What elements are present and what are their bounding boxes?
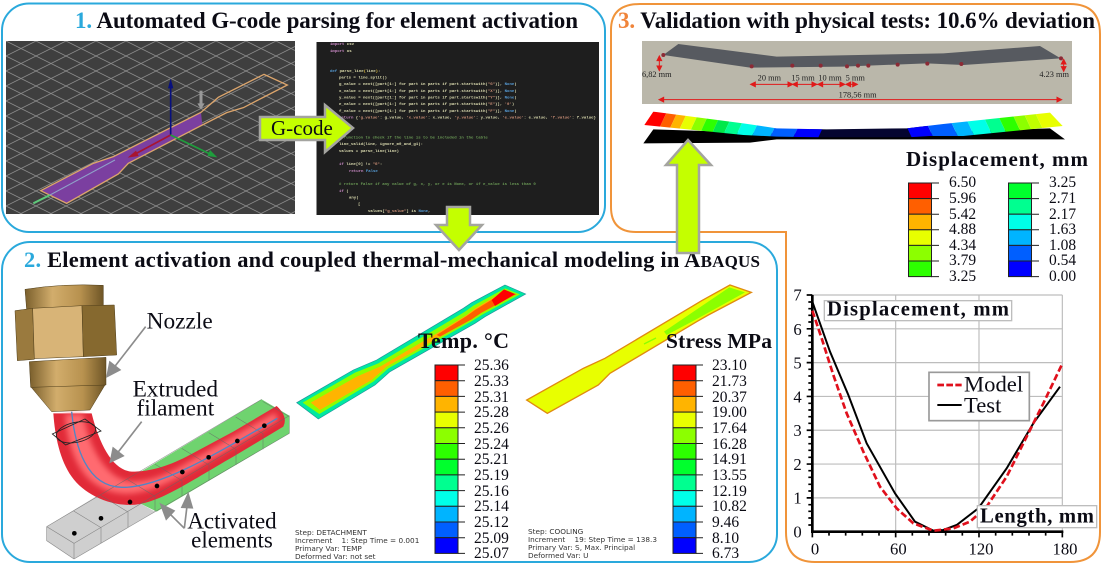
labels: lower range: 1.08 bbox=[1049, 237, 1076, 254]
labels: lower range bbox=[1049, 174, 1076, 285]
cross-section marker bbox=[52, 418, 101, 446]
labels: 12.19 bbox=[712, 483, 747, 500]
labels: upper range: 6.50 bbox=[949, 174, 976, 191]
labels: 25.24 bbox=[474, 436, 509, 453]
code editor screenshot: values = parse_line(line) bbox=[339, 149, 399, 154]
code editor screenshot: if line[0] != "G": bbox=[339, 162, 382, 167]
colour bar: lower range bbox=[1008, 183, 1039, 277]
x tick labels: 120 bbox=[969, 540, 993, 559]
illustration: nozzle and filament bbox=[15, 285, 289, 559]
code editor screenshot: any( bbox=[349, 196, 359, 200]
y tick labels: 3 bbox=[793, 421, 802, 440]
code editor screenshot: g_value = next([part[1:] for part in parts if part.startswith("G")], None) bbox=[339, 82, 517, 87]
toolpath line bbox=[33, 195, 50, 203]
label: y axis: Displacement, mm bbox=[827, 298, 1009, 320]
heading: panel 1: 1. Automated G-code parsing for element activation bbox=[75, 8, 578, 33]
labels: 6.73 bbox=[712, 545, 739, 562]
labels: 13.55 bbox=[712, 467, 747, 484]
arrow: step 2 to step 3 bbox=[666, 140, 711, 253]
labels: 25.36 bbox=[474, 357, 509, 374]
arrows: activated elements bbox=[159, 492, 193, 528]
labels: 25.28 bbox=[474, 404, 509, 421]
labels: lower range: 0.54 bbox=[1049, 252, 1076, 269]
code editor screenshot: parts = line.split() bbox=[339, 76, 387, 80]
solver info: temperature: Deformed Var: not set bbox=[295, 552, 376, 561]
element mesh bbox=[47, 399, 289, 559]
labels: 25.12 bbox=[474, 514, 509, 531]
labels: 25.14 bbox=[474, 498, 509, 515]
dimension labels: 4.23 mm bbox=[1039, 70, 1069, 79]
slicer 3D view bbox=[6, 41, 295, 214]
heading: panel 2: 2. Element activation and coupled thermal-mechanical modeling in ABAQUS bbox=[24, 247, 760, 272]
chart legend: Test bbox=[964, 393, 1002, 418]
code editor screenshot: def parse_line(line): bbox=[330, 69, 380, 74]
labels: 25.19 bbox=[474, 467, 509, 484]
labels: lower range: 1.63 bbox=[1049, 221, 1076, 238]
simulated deformed specimen bbox=[643, 112, 1065, 144]
arrow: nozzle bbox=[106, 327, 146, 378]
code editor screenshot: e_value = next([part[1:] for part in parts if part.startswith("E")], '0') bbox=[339, 102, 514, 107]
y tick labels: 0 bbox=[793, 522, 802, 541]
labels: 20.37 bbox=[712, 389, 747, 406]
code editor screenshot: f_value = next([part[1:] for part in parts if part.startswith("F")], None) bbox=[339, 109, 517, 114]
solver info: stress: Deformed Var: U bbox=[528, 551, 588, 560]
legend: stress: Stress MPa bbox=[666, 329, 772, 353]
deposition points bbox=[72, 423, 267, 536]
code editor screenshot: import os bbox=[330, 49, 352, 54]
labels bbox=[712, 357, 747, 562]
label: activated elements: Activated bbox=[187, 509, 277, 534]
labels: upper range bbox=[949, 174, 976, 285]
dimension labels: 178,56 mm bbox=[839, 91, 877, 100]
colour bar bbox=[435, 365, 465, 553]
solver info: temperature bbox=[295, 528, 419, 561]
dimension labels: 5 mm bbox=[846, 73, 865, 82]
y tick labels: 6 bbox=[793, 320, 802, 339]
contour: stress bbox=[527, 285, 751, 413]
axis: vertical bbox=[168, 85, 173, 135]
measure points bbox=[661, 53, 1063, 68]
code editor screenshot: line_valid(line, ignore_m0_and_g1): bbox=[339, 142, 423, 147]
grey inactive elements bbox=[47, 494, 155, 559]
nozzle body bbox=[15, 285, 117, 412]
label: activated elements: elements bbox=[191, 527, 273, 552]
dimension arrows bbox=[657, 56, 1066, 102]
labels: 19.00 bbox=[712, 404, 747, 421]
solver info: stress: Primary Var: S, Max. Principal bbox=[528, 543, 635, 552]
grid bbox=[812, 295, 1062, 532]
code editor screenshot: # return False if any value of g, x, y, or e is None, or if e_value is less than 0 bbox=[339, 182, 536, 187]
labels: upper range: 3.79 bbox=[949, 252, 976, 269]
labels: lower range: 2.71 bbox=[1049, 190, 1076, 207]
label: extruded filament bbox=[133, 377, 218, 422]
label: x axis: Length, mm bbox=[980, 506, 1094, 528]
axis: red bbox=[133, 135, 171, 155]
dimension labels: 20 mm bbox=[758, 73, 782, 82]
legend: displacement bbox=[906, 147, 1088, 285]
line chart: displacement vs length bbox=[793, 286, 1097, 559]
axis: green bbox=[171, 135, 210, 154]
solver info: temperature: Step: DETACHMENT bbox=[295, 528, 367, 537]
legend: temperature bbox=[418, 328, 509, 562]
heading: panel 3: 3. Validation with physical tests: 10.6% deviation bbox=[618, 8, 1095, 33]
solver info: stress: Step: COOLING bbox=[528, 527, 584, 536]
labels bbox=[474, 357, 509, 562]
code editor screenshot: import csv bbox=[330, 42, 355, 47]
dimension labels: 15 mm bbox=[791, 73, 815, 82]
x tick labels bbox=[811, 540, 1077, 559]
labels: upper range: 3.25 bbox=[949, 268, 976, 285]
series: test bbox=[812, 302, 1060, 531]
photo of printed specimen bbox=[642, 41, 1072, 104]
contour: temperature bbox=[297, 285, 526, 419]
y tick labels: 2 bbox=[793, 455, 802, 474]
labels: 9.46 bbox=[712, 514, 739, 531]
nozzle marker bbox=[196, 91, 205, 104]
legend: temperature: Temp. °C bbox=[418, 328, 509, 353]
code editor screenshot: x_value = next([part[1:] for part in parts if part.startswith("X")], None) bbox=[339, 89, 517, 94]
labels: lower range: 3.25 bbox=[1049, 174, 1076, 191]
label: activated elements bbox=[187, 509, 277, 552]
code editor screenshot: return False bbox=[349, 169, 378, 174]
specimen: printed portion bbox=[42, 112, 202, 203]
toolpath centreline bbox=[72, 412, 277, 487]
y tick labels bbox=[793, 286, 802, 541]
labels: 25.21 bbox=[474, 451, 509, 468]
labels: 23.10 bbox=[712, 357, 747, 374]
series: model bbox=[812, 311, 1062, 531]
dimension labels: 10 mm bbox=[818, 73, 842, 82]
solver info: temperature: Increment 1: Step Time = 0.001 bbox=[295, 536, 419, 545]
dimension labels bbox=[642, 70, 1069, 100]
labels: 21.73 bbox=[712, 373, 747, 390]
panel: G-code parsing outline bbox=[2, 4, 605, 232]
y tick labels: 7 bbox=[793, 286, 802, 305]
green activated elements bbox=[128, 399, 289, 512]
label: extruded filament: filament bbox=[136, 396, 215, 422]
y tick labels: 4 bbox=[793, 387, 802, 406]
labels: 25.33 bbox=[474, 373, 509, 390]
code editor screenshot: y_value = next([part[1:] for part in parts if part.startswith("Y")], None) bbox=[339, 96, 517, 100]
axes bbox=[812, 295, 1063, 532]
labels: upper range: 4.88 bbox=[949, 221, 976, 238]
panel: validation outline bbox=[611, 4, 1100, 562]
y tick labels: 5 bbox=[793, 354, 802, 373]
labels: 25.16 bbox=[474, 483, 509, 500]
x tick labels: 180 bbox=[1053, 540, 1077, 559]
labels: 25.09 bbox=[474, 530, 509, 547]
bent specimen bbox=[663, 44, 1061, 68]
colour bar bbox=[673, 365, 703, 553]
labels: upper range: 4.34 bbox=[949, 237, 976, 254]
colour bar: upper range bbox=[908, 183, 939, 277]
y tick labels: 1 bbox=[793, 489, 802, 508]
labels: upper range: 5.96 bbox=[949, 190, 976, 207]
arrow: G-code bbox=[260, 105, 353, 152]
label: nozzle: Nozzle bbox=[147, 308, 213, 334]
dimension labels: 6,82 mm bbox=[642, 70, 672, 79]
x tick labels: 0 bbox=[811, 540, 819, 559]
solver info: stress bbox=[528, 527, 657, 560]
code editor screenshot: return {'g_value': g_value, 'x_value': x_value, 'y_value': y_value, 'e_value': e_value, 'f_value': f_value} bbox=[339, 116, 596, 120]
labels: 10.82 bbox=[712, 498, 747, 515]
code editor screenshot bbox=[316, 42, 599, 215]
solver info: temperature: Primary Var: TEMP bbox=[295, 544, 362, 553]
labels: 14.91 bbox=[712, 451, 747, 468]
labels: 16.28 bbox=[712, 436, 747, 453]
labels: lower range: 0.00 bbox=[1049, 268, 1076, 285]
arrow: G-code: G-code bbox=[271, 116, 333, 140]
specimen outline bbox=[41, 74, 287, 203]
labels: lower range: 2.17 bbox=[1049, 206, 1076, 223]
legend: stress bbox=[666, 329, 772, 562]
chart legend bbox=[929, 371, 1029, 421]
code editor screenshot: values["g_value"] is None, bbox=[368, 209, 430, 214]
code editor screenshot: # function to check if the line is to be included in the table bbox=[339, 136, 488, 140]
chart legend: Model bbox=[964, 371, 1023, 396]
labels: upper range: 5.42 bbox=[949, 206, 976, 223]
code editor screenshot: [ bbox=[358, 202, 360, 207]
filament bbox=[53, 406, 285, 505]
labels: 25.31 bbox=[474, 389, 509, 406]
panel: element activation outline bbox=[2, 242, 777, 562]
code editor screenshot: if ( bbox=[339, 189, 349, 194]
arrow: step 1 to step 2 bbox=[436, 207, 482, 250]
labels: 25.26 bbox=[474, 420, 509, 437]
legend: displacement: Displacement, mm bbox=[906, 147, 1088, 171]
solver info: stress: Increment 19: Step Time = 138.3 bbox=[528, 535, 657, 544]
labels: 17.64 bbox=[712, 420, 747, 437]
x tick labels: 60 bbox=[890, 540, 907, 559]
labels: 25.07 bbox=[474, 545, 509, 562]
arrow: filament bbox=[109, 422, 142, 463]
label: extruded filament: Extruded bbox=[133, 377, 218, 403]
labels: 8.10 bbox=[712, 530, 739, 547]
